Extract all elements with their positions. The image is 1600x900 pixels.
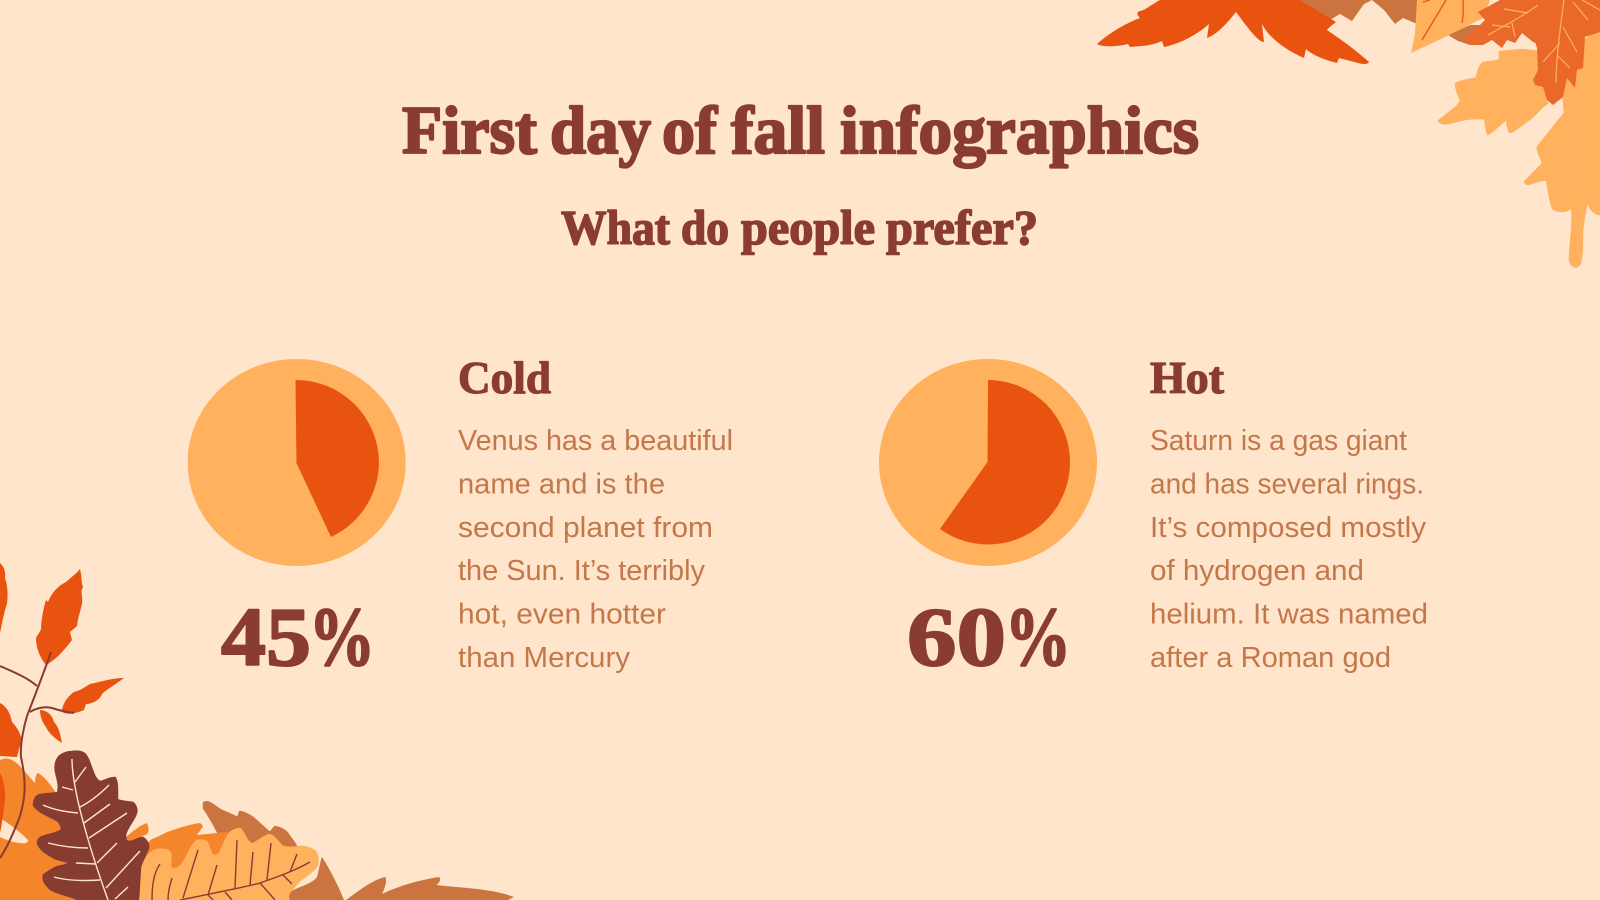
title: First [402,92,537,168]
heading: Cold: Cold [458,353,551,403]
title: infographics [840,92,1199,168]
text block: Saturn description: It’s composed mostly [1150,512,1427,544]
text block: Venus description: hot, even hotter [458,599,666,631]
text block: Venus description: than Mercury [458,642,631,674]
heading: Hot: Hot [1150,353,1224,403]
text block: Venus description: name and is the [458,468,665,500]
pie chart: hot 60% [879,359,1097,566]
percentage: 45%: 45 [221,591,311,684]
pie chart: cold 45% [188,359,406,566]
text block: Saturn description: after a Roman god [1150,642,1391,674]
text block: Venus description [458,425,733,674]
text block: Saturn description: helium. It was named [1150,599,1428,631]
subtitle: What [561,200,671,255]
decoration: top right autumn leaves [1097,0,1600,267]
percentage: 60%: 60 [907,591,1006,684]
title: of [662,92,718,168]
text block: Venus description: second planet from [458,512,713,544]
percentage: 45%: % [309,591,375,684]
decoration: bottom left autumn leaves and branch [0,563,514,900]
text block: Saturn description [1150,425,1428,674]
text block: Venus description: Venus has a beautiful [458,425,733,457]
percentage: 60%: % [1005,591,1071,684]
subtitle: prefer? [886,200,1038,255]
subtitle: people [741,200,875,255]
title: day [550,92,651,168]
title: fall [731,92,825,168]
text block: Saturn description: Saturn is a gas giant [1150,425,1407,457]
text block: Saturn description: and has several rings. [1150,468,1424,500]
text block: Saturn description: of hydrogen and [1150,555,1364,587]
text block: Venus description: the Sun. It’s terribly [458,555,705,587]
subtitle: do [681,200,729,255]
